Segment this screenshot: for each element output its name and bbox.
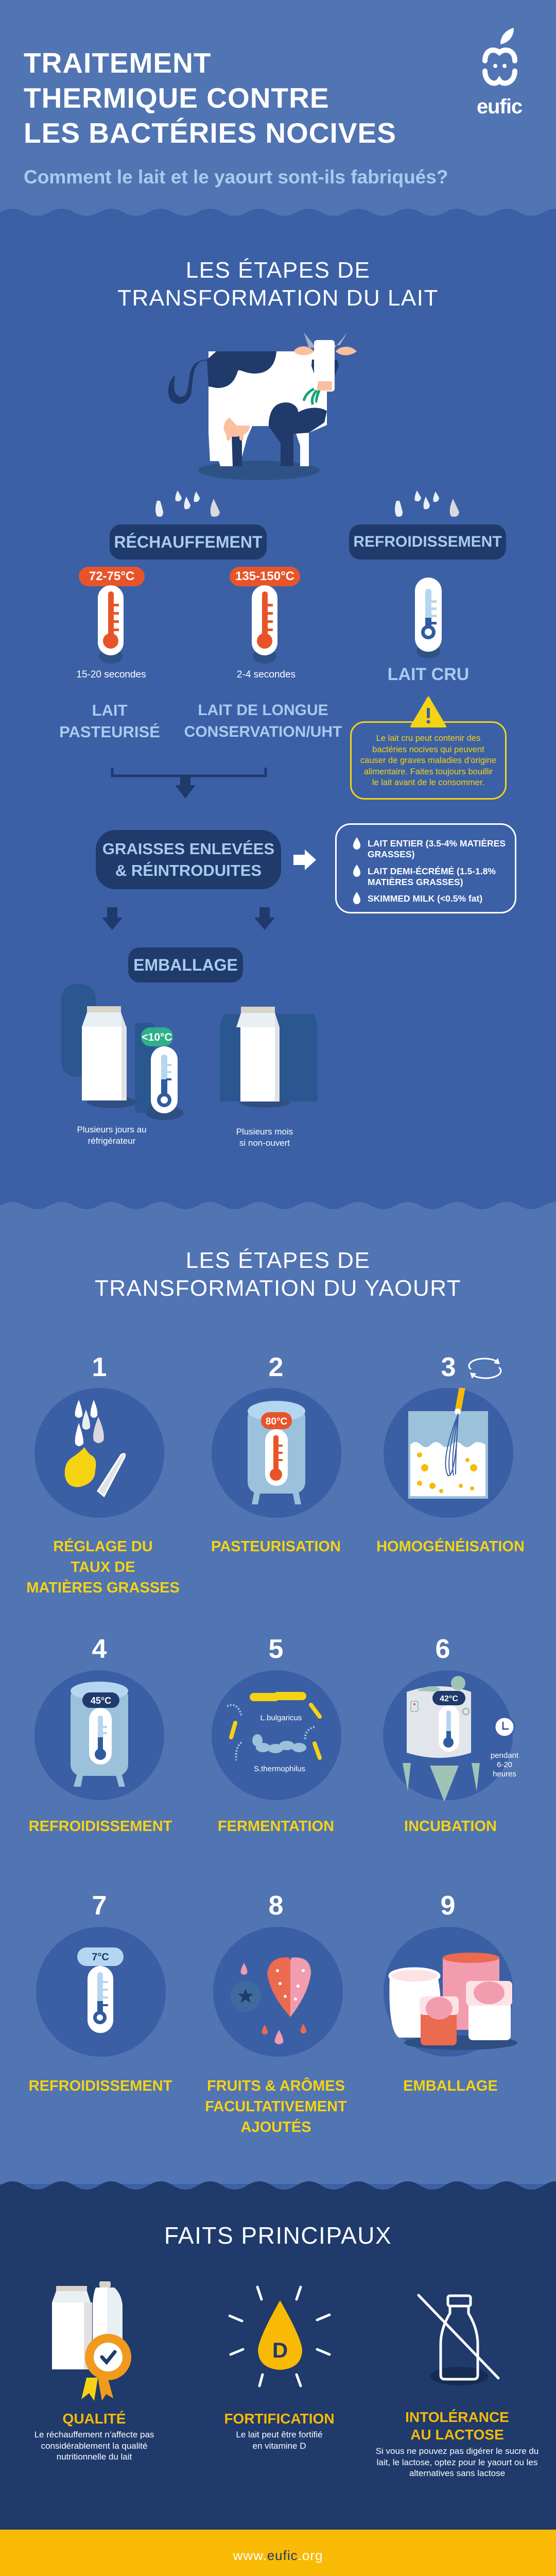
- label: lait UHT: LAIT DE LONGUE: [198, 702, 328, 719]
- step 6: INCUBATION: [404, 1818, 497, 1835]
- wave divider 2: [0, 1202, 556, 1215]
- icon: cooling tank 45°C: 45°C: [91, 1696, 111, 1706]
- step 5: FERMENTATION: [218, 1818, 334, 1835]
- pill: réchauffement: [110, 524, 267, 560]
- fact: intolérance au lactose: [375, 2280, 540, 2481]
- step 9: 9: [441, 1891, 455, 1921]
- section title: yaourt: TRANSFORMATION DU YAOURT: [95, 1276, 461, 1301]
- section title: lait: LES ÉTAPES DE: [186, 258, 370, 283]
- step 7: 7: [92, 1891, 107, 1921]
- icon: vitamin D drop: D: [272, 2338, 288, 2362]
- icon: incubation tank: [383, 1670, 519, 1802]
- arrow: right: [293, 850, 316, 870]
- step 7: [29, 1891, 172, 2094]
- step 1: TAUX DE: [71, 1559, 135, 1575]
- drops: cooling: [395, 490, 459, 517]
- callout: raw milk warning: [350, 697, 507, 800]
- title: THERMIQUE CONTRE: [24, 82, 329, 114]
- icon: pasteurisation tank: 80°C: [266, 1416, 288, 1427]
- step 2: 2: [269, 1352, 283, 1382]
- label: lait pasteurisé: [59, 701, 160, 741]
- drops: heating: [155, 490, 220, 517]
- section title: lait: [117, 258, 439, 311]
- yaourt background: [0, 1215, 556, 2184]
- text: plusieurs mois: [236, 1127, 293, 1148]
- callout: raw milk warning: causer de graves maladies d’origine: [360, 756, 496, 765]
- icon: yogurt pots: [384, 1927, 523, 2066]
- icon: rotation arrows: [468, 1358, 501, 1379]
- pill: emballage: [128, 947, 243, 982]
- fact: fortification: Le lait peut être fortifié: [236, 2430, 323, 2439]
- text: plusieurs jours: réfrigérateur: [88, 1136, 135, 1146]
- step 6: [383, 1634, 519, 1835]
- thermometer: 72-75°C: 72-75°C: [89, 569, 134, 583]
- section title: yaourt: LES ÉTAPES DE: [186, 1248, 370, 1273]
- step 4: [29, 1634, 172, 1835]
- icon: shelf carton: [220, 1007, 318, 1108]
- step 5: 5: [269, 1634, 283, 1664]
- step 8: FACULTATIVEMENT: [205, 2098, 347, 2115]
- thermometer: 72-75°C: [79, 567, 145, 664]
- text: 15-20 secondes: 15-20 secondes: [76, 669, 146, 680]
- pill: refroidissement: REFROIDISSEMENT: [353, 533, 502, 550]
- text: 2-4 secondes: 2-4 secondes: [237, 669, 296, 680]
- section title: yaourt: [95, 1248, 461, 1301]
- subtitle: Comment le lait et le yaourt sont-ils fabriqués?: [24, 166, 448, 188]
- icon: bacteria: [212, 1670, 341, 1800]
- fact: intolérance au lactose: AU LACTOSE: [410, 2427, 504, 2443]
- step 3: 3: [441, 1352, 456, 1382]
- icon: bacteria: S.thermophilus: [254, 1765, 305, 1773]
- icon: incubation tank: heures: [493, 1770, 516, 1778]
- pill: graisses: [96, 830, 281, 889]
- step 4: 4: [92, 1634, 107, 1664]
- arrow: bracket merge down: [111, 768, 267, 799]
- icon: bacteria: L.bulgaricus: [260, 1714, 302, 1722]
- icon: warning: [410, 697, 446, 727]
- title: TRAITEMENT: [24, 47, 211, 79]
- logo: eufic: eufic: [477, 95, 522, 118]
- icon: thermometer 7°C: [36, 1927, 166, 2057]
- text: plusieurs mois: Plusieurs mois: [236, 1127, 293, 1137]
- callout: raw milk warning: Le lait cru peut contenir des: [376, 734, 480, 743]
- pill: graisses: GRAISSES ENLEVÉES: [102, 840, 274, 857]
- step 1: MATIÈRES GRASSES: [26, 1580, 180, 1596]
- icon: strawberry: [213, 1927, 343, 2057]
- step 3: HOMOGÉNÉISATION: [376, 1538, 525, 1555]
- step 8: FRUITS & ARÔMES: [207, 2078, 345, 2094]
- callout: raw milk warning: le lait avant de le consommer.: [372, 778, 484, 787]
- thermometer: 135-150°C: 135-150°C: [235, 569, 294, 583]
- footer: [0, 2530, 556, 2576]
- icon: cooling tank 45°C: [34, 1670, 164, 1800]
- step 5: [212, 1634, 341, 1835]
- fact: fortification: en vitamine D: [253, 2441, 306, 2450]
- callout: raw milk warning: bactéries nocives qui peuvent: [372, 745, 484, 754]
- icon: incubation tank: 6-20: [497, 1760, 512, 1769]
- thermometer: 135-150°C: [230, 567, 300, 664]
- step 1: RÉGLAGE DU: [53, 1538, 153, 1555]
- step 2: [211, 1352, 341, 1555]
- footer: www.eufic.org: [233, 2548, 323, 2563]
- icon: pasteurisation tank: [212, 1388, 341, 1518]
- step 1: [26, 1352, 180, 1596]
- icon: crossed bottle: [416, 2293, 501, 2388]
- label: lait pasteurisé: PASTEURISÉ: [59, 723, 160, 741]
- section title: lait: TRANSFORMATION DU LAIT: [117, 285, 439, 311]
- icon: fridge carton with thermometer: <10°C: [142, 1031, 172, 1043]
- fact: qualité: QUALITÉ: [63, 2411, 126, 2427]
- pill: graisses: & RÉINTRODUITES: [115, 861, 262, 879]
- text: plusieurs mois: si non-ouvert: [239, 1138, 290, 1148]
- step 8: [205, 1891, 347, 2136]
- pill: réchauffement: RÉCHAUFFEMENT: [114, 533, 262, 551]
- label: lait UHT: [184, 702, 342, 740]
- step 2: PASTEURISATION: [211, 1538, 341, 1555]
- text: plusieurs jours: Plusieurs jours au: [77, 1125, 147, 1134]
- label: lait cru: LAIT CRU: [388, 665, 469, 684]
- wave divider 1: [0, 209, 556, 216]
- step 7: REFROIDISSEMENT: [29, 2078, 172, 2094]
- step 4: REFROIDISSEMENT: [29, 1818, 172, 1835]
- pill: refroidissement: [349, 524, 506, 560]
- section title: faits principaux: FAITS PRINCIPAUX: [164, 2222, 392, 2249]
- step 8: 8: [269, 1891, 283, 1921]
- text: plusieurs jours: [77, 1125, 147, 1146]
- fact: intolérance au lactose: INTOLÉRANCE: [405, 2409, 509, 2425]
- icon: fridge carton with thermometer: [61, 984, 183, 1120]
- step 9: [381, 1892, 535, 2140]
- icon: incubation tank: pendant: [491, 1751, 519, 1760]
- pill: emballage: EMBALLAGE: [133, 955, 238, 974]
- step 6: 6: [436, 1634, 450, 1664]
- icon: carton with badge: [50, 2280, 133, 2401]
- step 1: 1: [92, 1352, 107, 1382]
- title: [24, 47, 396, 149]
- label: lait pasteurisé: LAIT: [92, 701, 127, 719]
- icon: thermometer 7°C: 7°C: [92, 1952, 109, 1963]
- label: lait UHT: CONSERVATION/UHT: [184, 723, 342, 740]
- arrows: down to packaging: [102, 907, 275, 930]
- panel: milk types: SKIMMED MILK (<0.5% fat): [368, 893, 482, 904]
- panel: milk types: LAIT ENTIER (3.5-4% MATIÈRES GRASSES): [368, 838, 506, 859]
- thermometer: raw milk cold: [415, 578, 442, 658]
- fact: qualité: [22, 2280, 166, 2465]
- callout: raw milk warning: alimentaire. Faites toujours bouillir: [364, 767, 493, 776]
- fact: fortification: [206, 2280, 353, 2465]
- icon: cow: [168, 332, 357, 480]
- fact: intolérance au lactose: Si vous ne pouvez pas digérer le sucre du lait, le lactose, optez pour le yaourt ou les alternatives sans lactose: [376, 2446, 538, 2478]
- fact: qualité: Le réchauffement n’affecte pas considérablement la qualité nutritionnelle du lait: [34, 2430, 154, 2462]
- faits background: [0, 2193, 556, 2530]
- step 9: EMBALLAGE: [403, 2078, 498, 2094]
- panel: milk types: [335, 823, 516, 913]
- wave divider 3: [0, 2178, 556, 2194]
- step 8: AJOUTÉS: [241, 2119, 311, 2136]
- header background: [0, 0, 556, 216]
- step 3: [376, 1352, 525, 1555]
- icon: whisk bowl: [384, 1388, 513, 1518]
- icon: fat drops spoon: [34, 1388, 164, 1518]
- icon: vitamin D drop: [229, 2285, 332, 2388]
- icon: incubation tank: 42°C: [440, 1694, 458, 1703]
- panel: milk types: LAIT DEMI-ÉCRÉMÉ (1.5-1.8% MATIÈRES GRASSES): [368, 866, 496, 887]
- fact: fortification: FORTIFICATION: [224, 2411, 335, 2427]
- title: LES BACTÉRIES NOCIVES: [24, 117, 396, 149]
- logo: eufic: [477, 28, 522, 118]
